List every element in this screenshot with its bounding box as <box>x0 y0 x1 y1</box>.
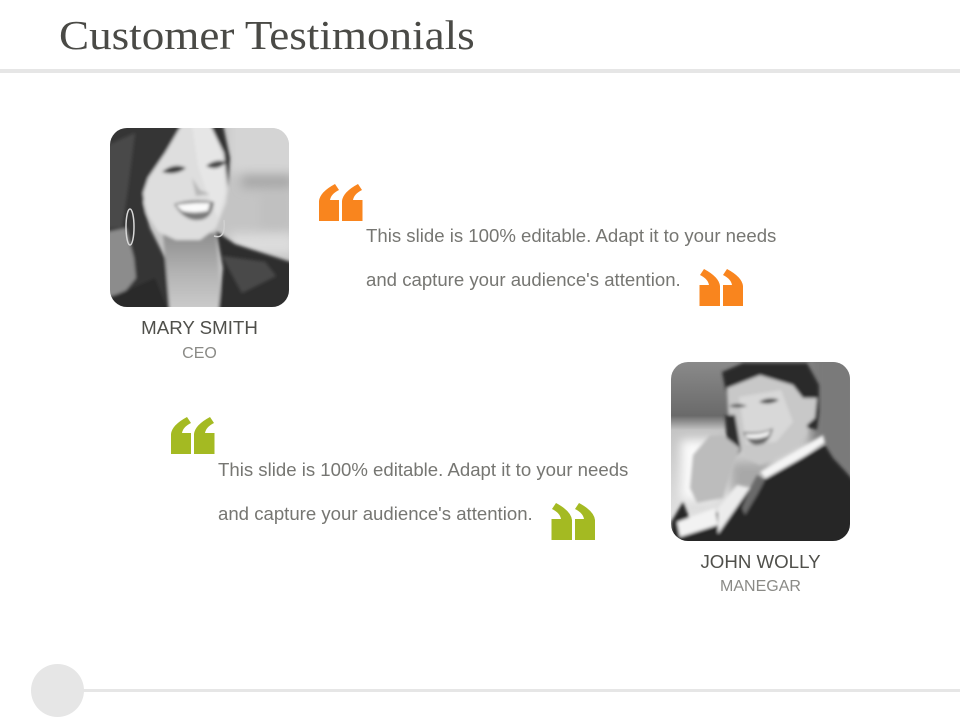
title: Customer Testimonials <box>59 12 475 58</box>
earrings <box>126 209 134 245</box>
quote text: This slide is 100% editable. Adapt it to your needs <box>366 224 776 246</box>
photo: Mary Smith <box>110 128 289 307</box>
icon: orange closing quote <box>700 269 743 306</box>
panel: testimonial Mary Smith <box>110 128 776 362</box>
photo: John Wolly <box>671 362 850 541</box>
quote text: This slide is 100% editable. Adapt it to your needs <box>218 458 628 480</box>
icon: green opening quote <box>171 417 214 454</box>
role: Manegar: MANEGAR <box>720 578 801 595</box>
quote text <box>366 224 776 290</box>
panel: testimonial John Wolly <box>171 362 850 595</box>
icon: green closing quote <box>552 503 595 540</box>
quote text: and capture your audience's attention. <box>218 502 533 524</box>
name: Mary Smith: MARY SMITH <box>141 317 258 338</box>
name: John Wolly: JOHN WOLLY <box>700 551 821 572</box>
role: CEO: CEO <box>182 345 217 362</box>
icon: orange opening quote <box>319 184 362 221</box>
quote text <box>218 458 628 524</box>
quote text: and capture your audience's attention. <box>366 268 681 290</box>
footer circle <box>31 664 84 717</box>
